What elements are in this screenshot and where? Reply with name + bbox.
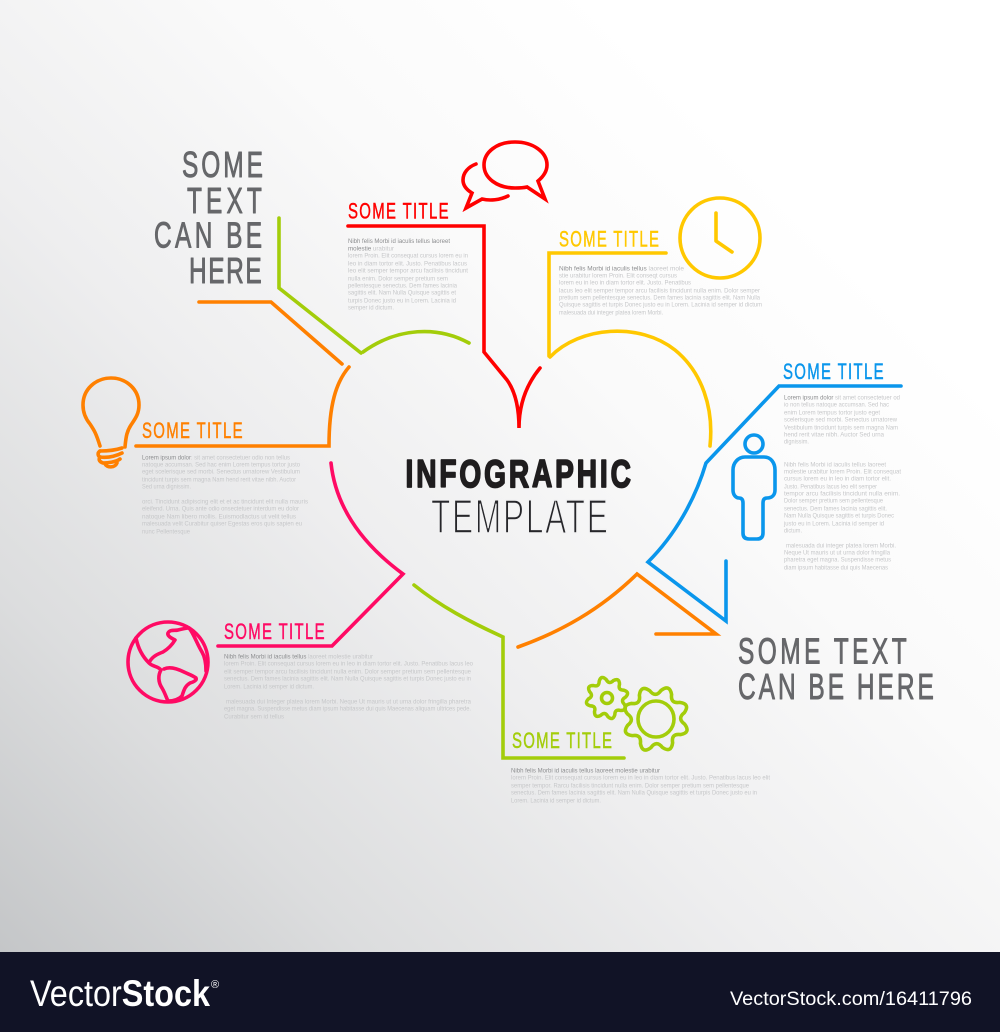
panel: blue person block: Nam Nulla Quisque sagittis et turpis Donec — [784, 512, 895, 520]
panel: orange bulb block: natoque Nam libero mollis. Euismodlactus ut velit tellus — [142, 514, 296, 520]
callout: some text can be here, bottom right — [738, 631, 934, 707]
main title: INFOGRAPHIC — [406, 453, 631, 496]
panel: red speech block: molestie urabitur — [348, 246, 395, 252]
panel: blue person block: justo eu in Lorem. Lacinia id semper id — [783, 520, 884, 528]
panel: green gears block: SOME TITLE — [512, 728, 612, 753]
icon: speech bubbles — [463, 142, 547, 208]
panel: blue person block: molestie urabitur lorem Proin. Elit consequat — [784, 468, 901, 476]
panel: orange bulb block: tincidunt turpis sem magna Nam hend rerit vitae nibh. Auctor — [142, 476, 297, 484]
callout: some text can be here, top left: CAN BE — [154, 215, 262, 256]
panel: yellow clock block: Quisque sagittis et turpis Donec justo eu in Lorem. Lacinia id semper id dictum — [559, 302, 762, 308]
panel: yellow clock block — [559, 227, 762, 316]
panel: red speech block: leo in diam tortor elit. Justo. Penatibus lacus — [348, 260, 467, 268]
panel: green gears block: senectus. Dem fames lacinia sagittis elit. Nam Nulla Quisque sagittis et turpis Donec justo eu in — [511, 790, 757, 796]
panel: blue person block: io non tellus natoque accumsan. Sed hac — [784, 402, 890, 408]
panel: orange bulb block: eget scelerisque sed morbi. Senectus urnatorew Vestibulum — [142, 468, 300, 476]
panel: orange bulb block: SOME TITLE — [142, 418, 243, 443]
main title — [406, 453, 631, 543]
panel: blue person block: Nibh felis Morbi id iaculis tellus laoreet — [784, 462, 886, 468]
panel: green gears block — [511, 728, 770, 804]
panel: red speech block: SOME TITLE — [348, 199, 449, 223]
panel: blue person block: scelerisque sed morbi. Senectus urnatorew — [784, 416, 897, 424]
panel: yellow clock block: lacus leo elit semper tempor arcu facilisis tincidunt nulla enim. Dolor semper — [559, 288, 761, 294]
panel: orange bulb block: eleifend. Urna. Quis ante odio onsectetuer interdum eu dolor — [142, 506, 300, 512]
panel: orange bulb block: Sed urna dignissim. — [142, 484, 191, 490]
panel: pink globe block: Nibh felis Morbi id iaculis tellus laoreet molestie urabitur — [224, 654, 374, 660]
panel: blue person block: malesuada dui integer platea lorem Morbi. — [786, 542, 896, 550]
panel: blue person block: senectus. Dem fames lacinia sagittis elit. — [784, 506, 887, 512]
footer url: VectorStock.com/16411796 — [730, 989, 972, 1010]
panel: green gears block: lorem Proin. Elit consequat cursus lorem eu in leo in diam tortor elit. Justo. Penatibus lacus leo elit — [511, 774, 770, 782]
panel: green gears block: semper tempor. Rarcu facilisis tincidunt nulla enim. Dolor semper pretium sem pellentesque — [511, 782, 749, 790]
panel: pink globe block: SOME TITLE — [224, 619, 325, 644]
footer registered mark: ® — [211, 979, 219, 991]
panel: red speech block: sagittis elit. Nam Nulla Quisque sagittis et — [348, 290, 456, 296]
panel: orange bulb block: natoque accumsan. Sed hac enim Lorem tempus tortor justo — [142, 462, 300, 468]
callout: some text can be here, top left: TEXT — [187, 180, 262, 221]
panel: red speech block: semper id dictum. — [348, 304, 394, 312]
panel: orange bulb block: orci. Tincidunt adipiscing elit et et ac tincidunt elit nulla mauris — [142, 498, 308, 506]
panel: red speech block: nulla enim. Dolor semper pretium sem — [348, 276, 448, 282]
panel: yellow clock block: stie urabitur lorem Proin. Elit conseqt cursus — [559, 272, 677, 280]
panel: yellow clock block: SOME TITLE — [559, 227, 659, 251]
panel: yellow clock block: malesuada dui integer platea lorem Morbi. — [559, 310, 663, 316]
panel: red speech block — [348, 199, 468, 312]
panel: red speech block: pellentesque senectus. Dem fames lacinia — [348, 282, 457, 290]
panel: pink globe block: Curabitur sem id tellus — [224, 714, 284, 720]
panel: green gears block: Lorem. Lacinia id semper id dictum. — [511, 798, 601, 804]
panel: pink globe block — [224, 619, 473, 720]
panel: green gears block: Nibh felis Morbi id iaculis tellus laoreet molestie urabitur — [511, 768, 661, 774]
panel: blue person block: Justo. Penatibus lacus leo elit semper — [784, 484, 878, 490]
icon: clock — [680, 198, 760, 278]
panel: red speech block: lorem Proin. Elit consequat cursus lorem eu in — [348, 252, 468, 260]
callout: some text can be here, bottom right: SOME TEXT — [738, 631, 907, 672]
icon: gears — [580, 671, 694, 757]
panel: blue person block: cursus lorem eu in leo in diam tortor elit. — [784, 476, 891, 482]
callout: some text can be here, bottom right: CAN BE HERE — [738, 666, 934, 707]
panel: blue person block: Neque Ut mauris ut ut urna dolor fringilla — [784, 550, 890, 556]
panel: blue person block: tempor arcu facilisis tincidunt nulla enim. — [784, 490, 900, 498]
panel: blue person block: hend rerit vitae nibh. Auctor Sed urna — [784, 432, 884, 438]
panel: yellow clock block: lorem eu in leo in diam tortor elit. Justo. Penatibus — [559, 280, 691, 286]
panel: blue person block: Vestibulum tincidunt turpis sem magna Nam — [784, 424, 898, 432]
panel: orange bulb block: Lorem ipsum dolor: sit amet consectetuer odio non tellus — [142, 454, 290, 462]
panel: pink globe block: eget magna. Suspendisse metus diam ipsum habitasse dui quis Maecenas aliquam ultrices pede. — [224, 706, 471, 712]
panel: orange bulb block — [142, 418, 308, 536]
panel: pink globe block: senectus. Dem fames lacinia sagittis elit. Nam Nulla Quisque sagittis et turpis Donec justo eu in — [224, 676, 471, 682]
panel: yellow clock block: pretium sem pellentesque senectus. Dem fames lacinia sagittis elit. Nam Nulla — [559, 294, 760, 302]
panel: blue person block: pharetra eget magna. Suspendisse metus — [784, 556, 891, 564]
panel: pink globe block: Lorem. Lacinia id semper id dictum. — [224, 684, 314, 690]
icon: globe — [128, 622, 208, 702]
panel: blue person block: Lorem ipsum dolor sit amet consectetuer od — [784, 394, 900, 402]
panel: pink globe block: elit semper tempor arcu facilisis tincidunt nulla enim. Dolor semper pretium sem pellentesque — [224, 668, 471, 676]
callout: some text can be here, top left: HERE — [189, 250, 262, 291]
panel: orange bulb block: malesuada velit Curabitur quiser Egestas eros quis sapien eu — [142, 520, 302, 528]
main title: TEMPLATE — [431, 489, 608, 543]
panel: yellow clock block: Nibh felis Morbi id iaculis tellus laoreet mole — [559, 266, 684, 272]
panel: blue person block: dignissim. — [784, 438, 809, 446]
footer bar — [0, 952, 1000, 1032]
icon: light bulb — [83, 378, 139, 467]
panel: blue person block: dictum. — [784, 528, 802, 534]
panel: pink globe block: malesuada dui Integer platea lorem Morbi. Neque Ut mauris ut ut urna dolor fringilla pharetra — [226, 698, 471, 706]
panel: blue person block: diam ipsum habitasse dui quis Maecenas — [784, 564, 888, 572]
callout: some text can be here, top left — [154, 144, 263, 291]
panel: blue person block: enim Lorem tempus tortor justo eget — [784, 410, 880, 416]
panel: red speech block: Nibh felis Morbi id iaculis tellus laoreet — [348, 238, 450, 245]
panel: blue person block — [783, 359, 901, 572]
panel: red speech block: turpis Donec justo eu in Lorem. Lacinia id — [348, 298, 456, 304]
icon: person — [733, 435, 775, 539]
callout: some text can be here, top left: SOME — [182, 144, 263, 185]
panel: red speech block: leo elit semper tempor arcu facilisis tincidunt — [348, 268, 468, 274]
panel: orange bulb block: nunc Pellentesque — [142, 528, 190, 536]
heart outline and connector lines — [136, 218, 901, 758]
footer logo: VectorStock — [30, 973, 210, 1014]
panel: blue person block: Dolor semper pretium sem pellentesque — [784, 498, 883, 504]
panel: blue person block: SOME TITLE — [783, 359, 884, 384]
panel: pink globe block: lorem Proin. Elit consequat cursus lorem eu in leo in diam tortor elit. Justo. Penatibus lacus leo — [224, 660, 473, 668]
